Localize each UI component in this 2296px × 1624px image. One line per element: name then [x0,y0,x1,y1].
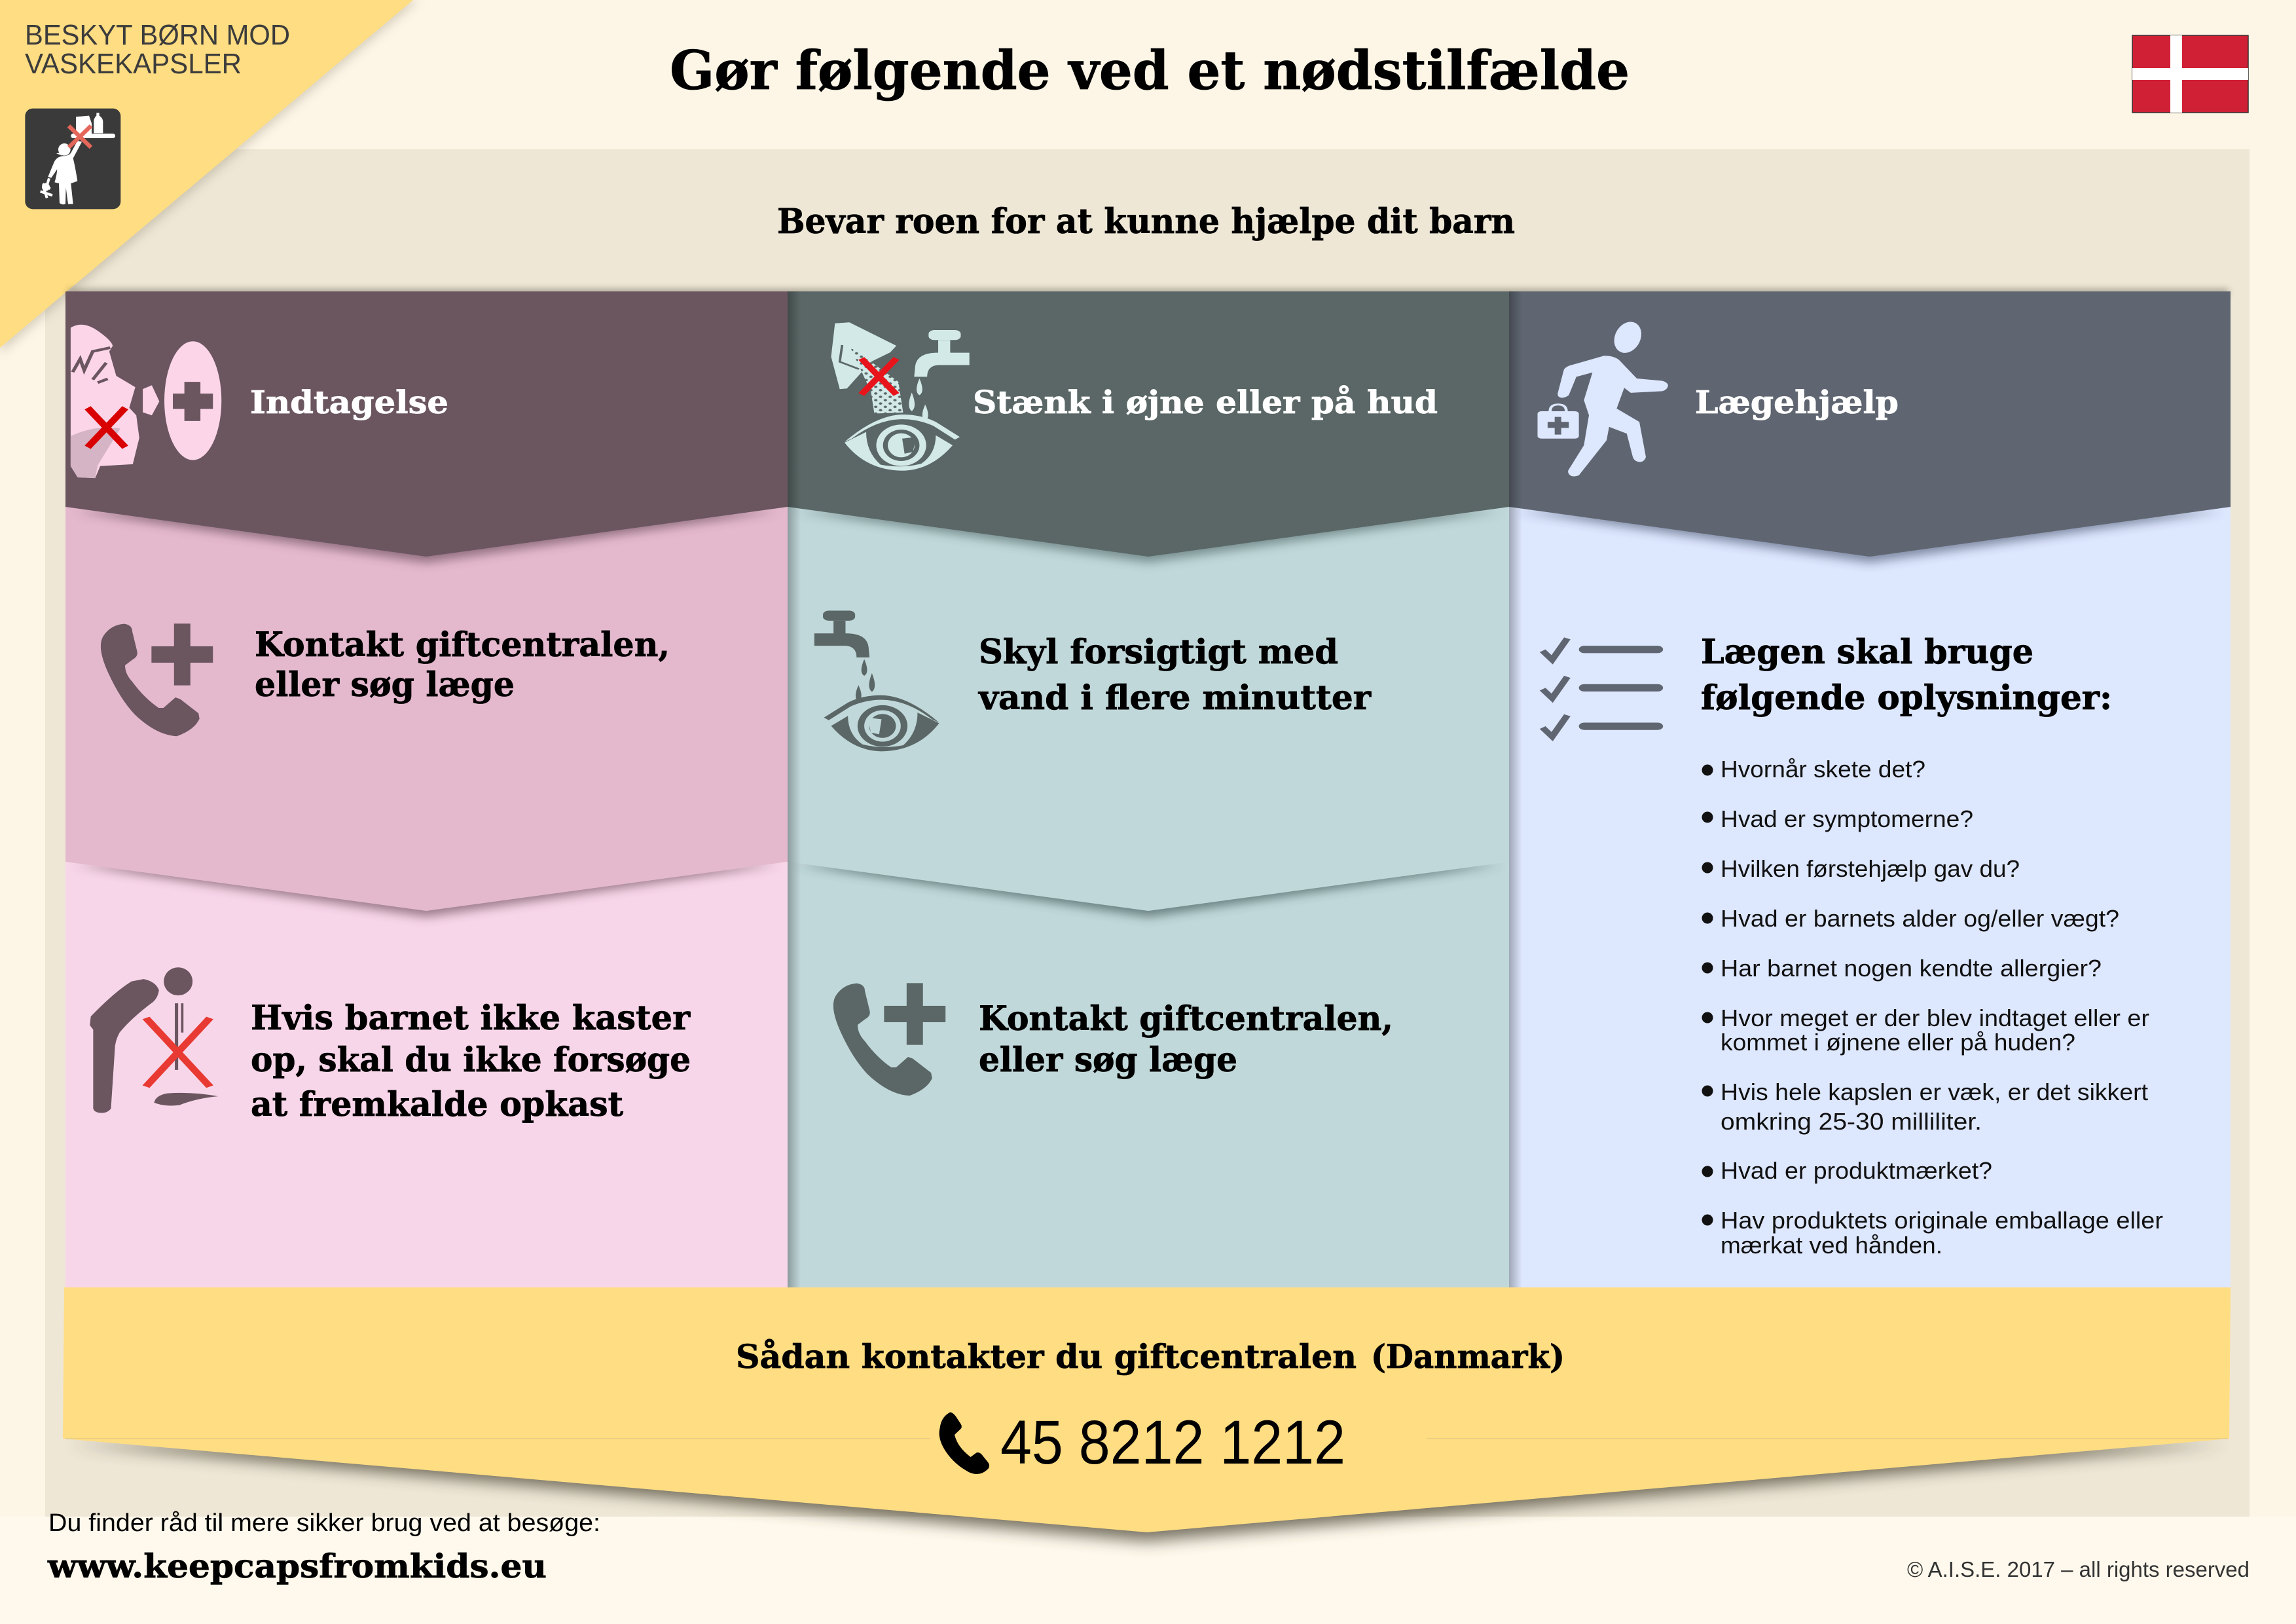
header band [788,291,1509,557]
checklist of questions [1702,756,2163,1259]
icon: phone and cross [833,983,945,1096]
icon: phone handset [939,1412,989,1474]
list heading: følgende oplysninger: [1701,678,2112,718]
icon: no vomiting [90,967,218,1113]
footer: website: Du finder råd til mere sikker brug ved at besøge: [48,1509,600,1537]
step text: contact: eller søg læge [979,1041,1237,1080]
header band [65,291,788,557]
footer: website [47,1509,600,1585]
icon: child reaching for shelf [25,109,120,209]
step text: do not induce vomiting: at fremkalde opkast [251,1085,623,1124]
list heading: Lægen skal bruge [1701,633,2033,672]
flag: Denmark [2132,35,2248,113]
step text: contact: Kontakt giftcentralen, [979,999,1393,1039]
banner text: VASKEKAPSLER [25,48,242,80]
checklist of questions: Hvad er barnets alder og/eller vægt? [1721,905,2119,932]
callout heading: Sådan kontakter du giftcentralen [736,1337,1357,1376]
columns top shadow [68,289,2229,295]
column heading: Indtagelse [250,384,448,421]
checklist of questions: mærkat ved hånden. [1721,1232,1942,1259]
list heading [1701,633,2112,718]
corner banner [0,0,419,354]
step text: do not induce vomiting: Hvis barnet ikke kaster [251,999,691,1038]
icon: phone and cross [101,623,213,736]
checklist of questions: Hvor meget er der blev indtaget eller er [1721,1005,2149,1031]
checklist of questions: Har barnet nogen kendte allergier? [1721,955,2102,982]
callout: poison centre contact [63,1287,2231,1541]
phone number: 45 8212 1212 [1000,1408,1345,1477]
panel: Stænk column [788,291,1509,1287]
checklist of questions: Hvornår skete det? [1721,756,1925,783]
checklist of questions: Hav produktets originale emballage eller [1721,1207,2163,1234]
header band [1509,291,2231,557]
footer background [0,1517,2296,1624]
step text: rinse: vand i flere minutter [978,678,1372,718]
checklist of questions: kommet i øjnene eller på huden? [1721,1029,2075,1056]
icon: tap and eye [814,611,939,751]
footer: copyright: © A.I.S.E. 2017 – all rights reserved [1907,1557,2250,1581]
checklist of questions: Hvis hele kapslen er væk, er det sikkert [1721,1079,2148,1105]
checklist of questions: Hvilken førstehjælp gav du? [1721,855,2020,882]
checklist of questions: Hvad er symptomerne? [1721,805,1973,832]
icon: running person with first aid kit [1537,320,1668,477]
panel: Lægehjælp column [1509,291,2231,1287]
footer: website: www.keepcapsfromkids.eu [47,1547,547,1585]
step text: rinse [978,633,1372,718]
column heading: Stænk i øjne eller på hud [973,384,1438,421]
column edge shadows [788,291,1522,1287]
column heading: Lægehjælp [1695,384,1899,421]
step text: do not induce vomiting [251,999,691,1124]
banner text: BESKYT BØRN MOD [25,19,290,51]
step text: do not induce vomiting: op, skal du ikke forsøge [251,1041,691,1080]
checklist of questions: omkring 25-30 milliliter. [1721,1108,1982,1135]
title: Gør følgende ved et nødstilfælde [670,40,1630,102]
banner text [25,19,290,80]
panel: Indtagelse column [65,291,788,1287]
callout heading: (Danmark) [1371,1337,1565,1376]
checklist of questions: Hvad er produktmærket? [1721,1157,1992,1184]
step text: contact [979,999,1393,1080]
subheading: Bevar roen for at kunne hjælpe dit barn [777,202,1515,242]
icon: checklist [1542,638,1663,737]
icon: capsule splash, tap and eye [831,322,970,471]
step text: contact [255,625,670,705]
icon: face with poison centre [71,325,221,478]
step text: contact: eller søg læge [255,665,515,705]
step text: contact: Kontakt giftcentralen, [255,625,670,665]
step text: rinse: Skyl forsigtigt med [979,633,1338,672]
